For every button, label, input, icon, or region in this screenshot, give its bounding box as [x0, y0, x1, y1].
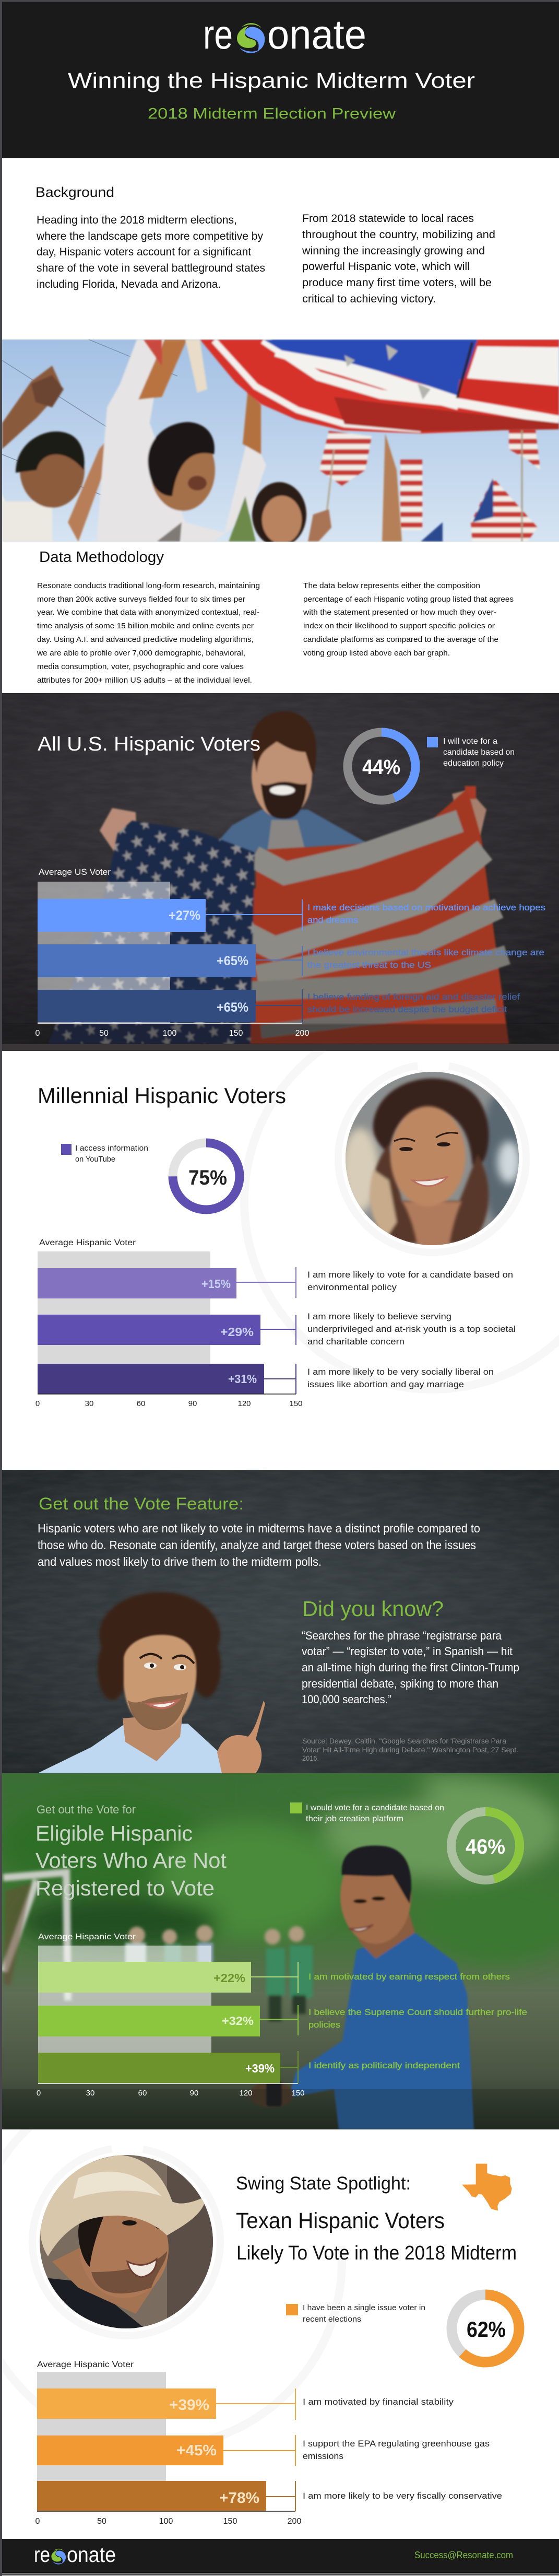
logo: resonate: [203, 11, 366, 57]
quote: [302, 1629, 519, 1706]
text block: background right: produce many first time voters, will be: [302, 277, 492, 289]
bar chart: all US: I make decisions based on motivation to achieve hopes: [307, 903, 545, 912]
bar chart: millennial: 0: [35, 1399, 40, 1408]
donut: 44%: [348, 732, 415, 800]
bar chart: not registered: +22%: [213, 1971, 245, 1985]
legend: education policy: candidate based on: [443, 748, 515, 757]
bar chart: Texas: 200: [288, 2517, 301, 2526]
bar chart: not registered: 0: [37, 2089, 41, 2098]
text block: methodology right: percentage of each Hispanic voting group listed that agrees: [303, 595, 514, 604]
heading: Swing State Spotlight:: [236, 2173, 411, 2194]
man: [249, 1846, 474, 2129]
heading: Data Methodology: Data Methodology: [39, 549, 164, 566]
heading: Get out the Vote for: [37, 1803, 136, 1816]
text block: methodology right: The data below represents either the composition: [303, 581, 480, 590]
legend: single issue: recent elections: [303, 2315, 361, 2324]
bar chart: not registered: 120: [239, 2089, 253, 2098]
donut: 46%: [451, 1811, 520, 1880]
bar chart: millennial: +29%: [220, 1325, 254, 1339]
flag: [48, 789, 511, 1044]
text block: methodology right: candidate platforms as compared to the average of the: [303, 635, 498, 644]
text block: background right: From 2018 statewide to local races: [302, 213, 474, 225]
bar chart: Texas: +78%: [219, 2490, 259, 2507]
footer logo: re: [34, 2543, 50, 2567]
quote: an all-time high during the first Clinton-Trump: [302, 1661, 519, 1674]
bar chart: all US: should be increased despite the budget deficit: [307, 1004, 507, 1014]
text block: background right: throughout the country, mobilizing and: [302, 229, 495, 241]
bar chart: not registered: Average Hispanic Voter: [38, 1933, 136, 1941]
text block: methodology right: [303, 581, 514, 658]
heading: Likely To Vote in the 2018 Midterm: [236, 2242, 517, 2264]
bar chart: all US: Average US Voter: [39, 867, 111, 877]
bar chart: not registered: I am motivated by earning respect from others: [308, 1972, 510, 1982]
text block: methodology right: with the statement presented or how much they over-: [303, 608, 496, 617]
bar chart: not registered: 90: [190, 2089, 198, 2098]
donut: 44%: 44%: [362, 756, 400, 779]
text block: background right: critical to achieving victory.: [302, 293, 436, 305]
bar chart: Texas: 150: [223, 2517, 237, 2526]
source note: 2016.: [302, 1754, 319, 1762]
bar chart: millennial: [35, 1238, 516, 1408]
text block: methodology left: day. Using A.I. and advanced predictive modeling algorithms,: [37, 635, 254, 644]
legend: YouTube: on YouTube: [75, 1155, 115, 1164]
bar chart: Texas: [35, 2360, 502, 2526]
decorative rings: [0, 2076, 342, 2447]
panel: Millennial Hispanic Voters: [35, 1072, 519, 1406]
legend: education policy: education policy: [443, 759, 504, 768]
bar chart: millennial: I am more likely to believe serving: [307, 1312, 451, 1321]
text block: [38, 1521, 480, 1568]
heading: [236, 2173, 517, 2264]
bar chart: not registered: 150: [291, 2089, 305, 2098]
bar chart: Texas: 100: [159, 2517, 173, 2526]
bar chart: millennial: and charitable concern: [307, 1337, 405, 1346]
text block: background right: powerful Hispanic vote, which will: [302, 261, 470, 273]
legend: single issue: I have been a single issue voter in: [303, 2303, 425, 2312]
bar chart: Texas: Average Hispanic Voter: [37, 2360, 134, 2369]
photo: soccer coach on field: [0, 1771, 559, 2129]
footer logo: onate: [67, 2543, 116, 2567]
legend: education policy: I will vote for a: [443, 737, 497, 746]
text block: background right: [302, 213, 495, 305]
heading: Background: Background: [35, 184, 114, 200]
heading: Eligible Hispanic: [35, 1821, 193, 1845]
bar chart: all US: 100: [163, 1029, 176, 1038]
header banner: [2, 2, 559, 158]
contact email: Success@Resonate.com: [414, 2550, 513, 2560]
legend: job creation: [290, 1802, 444, 1823]
bar chart: not registered: +32%: [222, 2014, 254, 2028]
bar chart: millennial: 150: [289, 1399, 303, 1408]
decorative rings: [244, 1013, 559, 1389]
text block: methodology left: year. We combine that data with anonymized contextual, real-: [37, 608, 259, 617]
source note: Source: Dewey, Caitlin. "Google Searches for 'Registrarse Para: [302, 1737, 506, 1745]
bar chart: Texas: I support the EPA regulating greenhouse gas: [303, 2439, 490, 2449]
bar chart: all US: and dreams: [307, 915, 358, 925]
heading: Millennial Hispanic Voters: [38, 1083, 286, 1108]
footer logo: [34, 2543, 116, 2567]
photo: crowd holding American flag: [2, 339, 559, 547]
heading: [35, 1803, 227, 1900]
bar chart: all US: +65%: [217, 1000, 248, 1015]
quote: votar” — “register to vote,” in Spanish — hit: [302, 1645, 513, 1658]
text block: background right: winning the increasingly growing and: [302, 245, 485, 257]
bar chart: millennial: Average Hispanic Voter: [39, 1238, 136, 1247]
text block: methodology left: we are able to profile over 7,000 demographic, behavioral,: [37, 649, 245, 658]
bar chart: millennial: I am more likely to vote for a candidate based on: [307, 1270, 513, 1280]
footer: [2, 2539, 559, 2573]
bar chart: not registered: [37, 1933, 527, 2098]
text block: background left: where the landscape gets more competitive by: [36, 230, 263, 242]
bar chart: Texas: emissions: [303, 2452, 343, 2461]
subtitle: 2018 Midterm Election Preview: [148, 106, 396, 122]
title: Winning the Hispanic Midterm Voter: [68, 68, 475, 92]
bar chart: all US: I believe environmental threats like climate change are: [307, 947, 544, 957]
heading: Registered to Vote: [35, 1876, 215, 1900]
bar chart: all US: the greatest threat to the US: [307, 960, 431, 970]
donut: 62%: 62%: [467, 2317, 506, 2341]
bar chart: all US: [35, 867, 545, 1038]
bar chart: millennial: underprivileged and at-risk youth is a top societal: [307, 1325, 516, 1334]
bar chart: all US: +27%: [169, 908, 200, 923]
donut: 62%: [452, 2295, 519, 2362]
bar chart: not registered: +39%: [245, 2062, 275, 2075]
small flags: [319, 426, 540, 542]
bar chart: millennial: 30: [85, 1399, 93, 1408]
photo: woman portrait: [341, 1071, 527, 1248]
legend: education policy: [427, 737, 515, 768]
text block: methodology left: media consumption, voter, psychographic and core values: [37, 662, 244, 671]
people: [2, 339, 402, 547]
bar chart: millennial: 120: [237, 1399, 251, 1408]
bar chart: all US: 150: [229, 1029, 243, 1038]
donut: 75%: 75%: [188, 1166, 227, 1189]
icon: swirl S: [237, 23, 265, 53]
bar chart: not registered: 60: [138, 2089, 147, 2098]
bar chart: millennial: 90: [188, 1399, 197, 1408]
heading: did you know: Did you know?: [302, 1597, 444, 1621]
bar chart: Texas: 0: [35, 2517, 40, 2526]
heading: All U.S. Hispanic Voters: [38, 733, 260, 755]
text block: methodology left: attributes for 200+ million US adults – at the individual level.: [37, 676, 252, 685]
bar chart: Texas: I am more likely to be very fiscally conservative: [303, 2491, 502, 2501]
logo: resonate: re: [203, 11, 233, 57]
heading: Texan Hispanic Voters: [236, 2208, 445, 2233]
bar chart: not registered: I believe the Supreme Court should further pro-life: [308, 2007, 527, 2017]
bar chart: millennial: 60: [137, 1399, 145, 1408]
text block: methodology left: time analysis of some 15 billion mobile and online events per: [37, 622, 254, 630]
bar chart: Texas: +39%: [169, 2397, 209, 2414]
legend: YouTube: I access information: [75, 1144, 148, 1153]
bar chart: all US: 200: [295, 1029, 309, 1038]
text block: methodology left: more than 200k active surveys fielded four to six times per: [37, 595, 245, 604]
source note: Votar' Hit All-Time High during Debate." Washington Post, 27 Sept.: [302, 1746, 518, 1754]
bar chart: millennial: +31%: [228, 1372, 257, 1386]
donut: 75%: [173, 1143, 240, 1210]
quote: “Searches for the phrase “registrarse para: [302, 1629, 502, 1642]
panel: Swing State Spotlight: [0, 2076, 519, 2526]
photo: man pointing: [38, 1592, 265, 1773]
bar chart: not registered: 30: [86, 2089, 94, 2098]
donut: 46%: 46%: [466, 1835, 505, 1858]
bar chart: millennial: I am more likely to be very socially liberal on: [307, 1367, 494, 1377]
legend: job creation: their job creation platform: [306, 1814, 403, 1823]
bar chart: all US: 0: [35, 1029, 40, 1038]
bar chart: all US: I believe funding of foreign aid and disaster relief: [307, 992, 520, 1002]
bar chart: millennial: environmental policy: [307, 1283, 397, 1292]
text block: background left: share of the vote in several battleground states: [37, 262, 265, 274]
text block: background left: day, Hispanic voters account for a significant: [37, 246, 251, 258]
photo: man holding flag: [2, 693, 559, 1044]
bar chart: not registered: I identify as politically independent: [308, 2060, 460, 2070]
text block: those who do. Resonate can identify, analyze and target these voters based on the issues: [38, 1538, 476, 1552]
text block: background left: Heading into the 2018 midterm elections,: [37, 214, 237, 226]
photo: man in cowboy hat: [39, 2154, 214, 2329]
heading: Voters Who Are Not: [35, 1848, 227, 1872]
text block: methodology right: voting group listed above each bar graph.: [303, 649, 450, 658]
bar chart: Texas: 50: [97, 2517, 106, 2526]
goalpost: [3, 1872, 68, 2000]
text block: methodology left: [37, 581, 260, 685]
quote: presidential debate, spiking to more than: [302, 1677, 498, 1690]
quote: 100,000 searches.”: [302, 1693, 391, 1706]
legend: single issue: [286, 2303, 425, 2324]
panel: All U.S. Hispanic Voters: [2, 693, 559, 1051]
heading: Get out the Vote Feature:: [39, 1494, 244, 1513]
bar chart: all US: +65%: [217, 954, 248, 968]
text block: methodology left: Resonate conducts traditional long-form research, maintaining: [37, 581, 260, 590]
legend: job creation: I would vote for a candidate based on: [306, 1804, 444, 1812]
bar chart: not registered: policies: [308, 2020, 340, 2030]
panel: Eligible voters not registered: [0, 1771, 559, 2129]
bar chart: millennial: +15%: [201, 1277, 231, 1291]
logo: resonate: onate: [267, 11, 366, 57]
text block: background left: [36, 214, 265, 290]
text block: Hispanic voters who are not likely to vote in midterms have a distinct profile compared to: [38, 1521, 480, 1535]
source note: [302, 1737, 518, 1762]
bar chart: Texas: I am motivated by financial stability: [303, 2397, 454, 2407]
icon: Texas: [462, 2164, 512, 2211]
bar chart: Texas: +45%: [176, 2442, 217, 2459]
bar chart: all US: 50: [99, 1029, 109, 1038]
text block: background left: including Florida, Nevada and Arizona.: [37, 278, 221, 290]
bar chart: millennial: issues like abortion and gay marriage: [307, 1380, 464, 1389]
text block: and values most likely to drive them to the midterm polls.: [38, 1555, 322, 1568]
panel: Get out the Vote feature: [2, 1470, 559, 1773]
big flag: [144, 339, 559, 434]
legend: YouTube: [61, 1144, 148, 1164]
players: [125, 1925, 313, 2021]
text block: methodology right: index on their likelihood to support specific policies or: [303, 622, 495, 630]
